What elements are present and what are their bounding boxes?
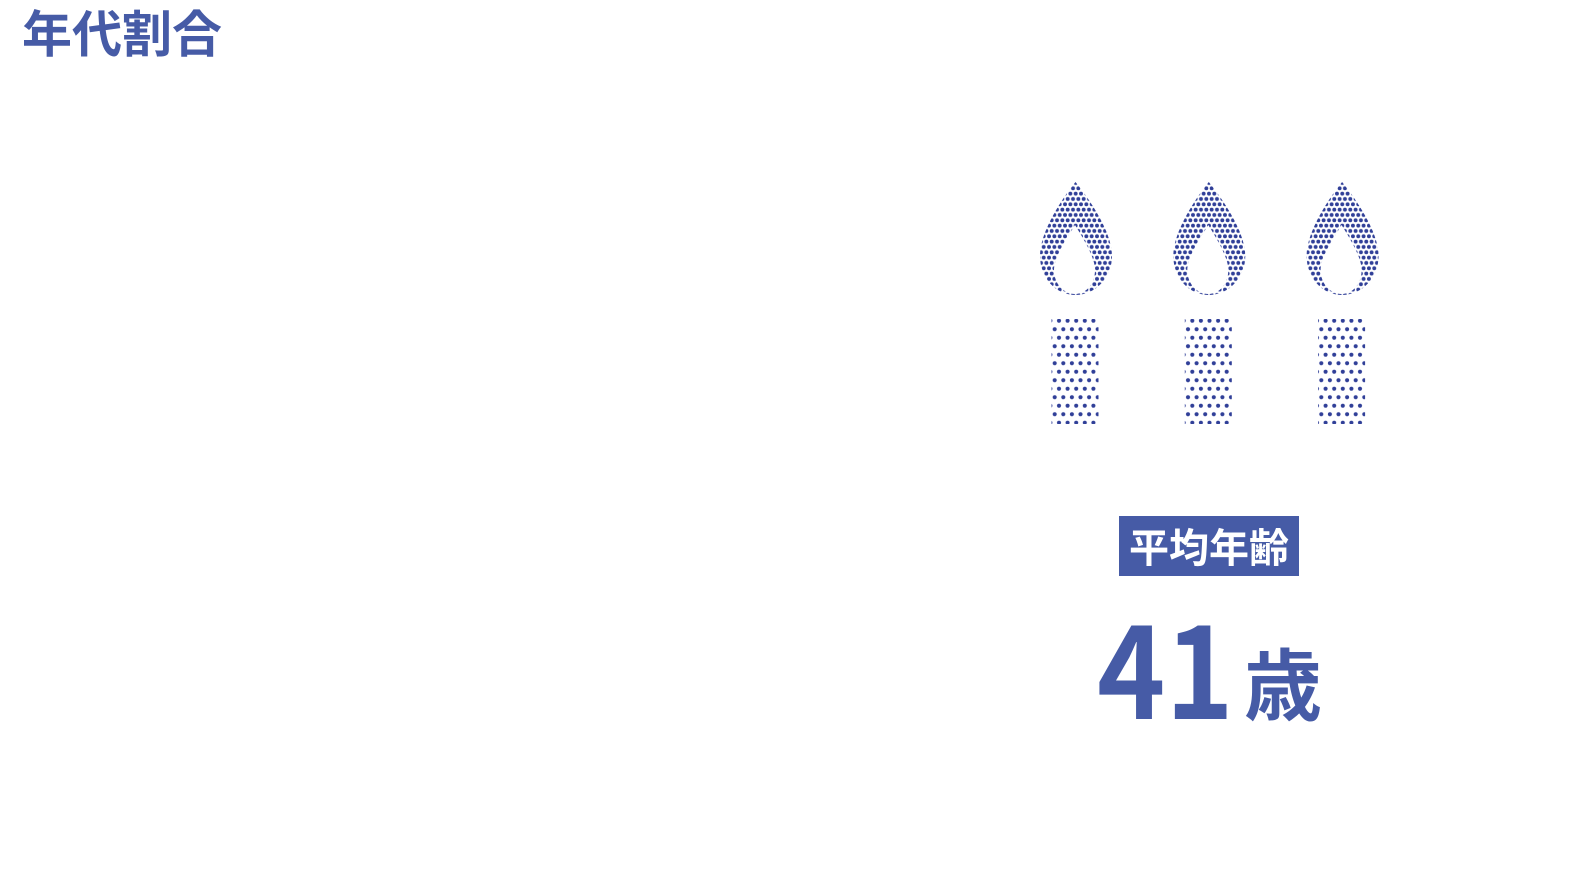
unit: years old: 歳 (1244, 625, 1322, 737)
flame 1 (1040, 182, 1112, 295)
label badge: average age (1119, 516, 1299, 576)
candle 3 (1307, 182, 1379, 424)
flame 3 (1307, 182, 1379, 295)
badge text: 平均年齢 (1129, 516, 1289, 574)
wax body 1 (1052, 319, 1098, 424)
number 41: 41 (1097, 574, 1234, 756)
wax body 2 (1185, 319, 1232, 424)
wax body 3 (1318, 319, 1365, 424)
candle 2 (1173, 182, 1245, 424)
flame 2 (1173, 182, 1245, 295)
average age value (1097, 574, 1322, 756)
candle 1 (1040, 182, 1112, 424)
